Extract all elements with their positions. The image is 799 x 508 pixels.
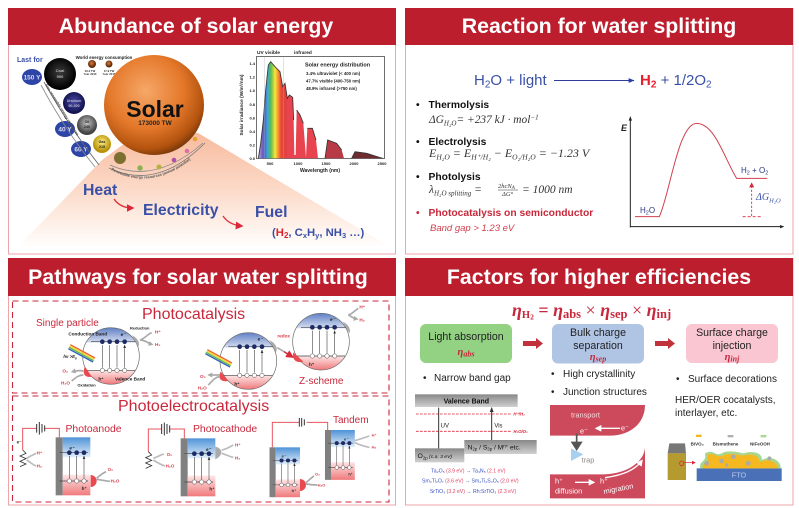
single particle diagram	[36, 318, 161, 387]
box: surface charge injection: Surface charge	[696, 327, 768, 339]
energy diagram: H	[640, 206, 646, 215]
box: light absorption: Light absorption	[428, 331, 504, 343]
band gap diagram: Vis	[494, 423, 503, 429]
photoanode diagram: e⁻	[17, 439, 22, 444]
heading: pathways for solar water splitting: Pathways for solar water splitting	[28, 265, 368, 289]
solar spectrum chart	[239, 50, 387, 174]
factor bullets: HER/OER cocatalysts,	[675, 395, 776, 406]
world energy consumption	[76, 55, 133, 76]
band gap diagram: Sm₂Ti₂O₇ (3.6 eV) → Sm₂Ti₂S₂O₅ (2.0 eV)	[422, 479, 519, 485]
solar spectrum chart: 2000	[350, 161, 359, 166]
reaction equation: H	[474, 72, 485, 89]
band gap diagram: H₂O/O₂	[513, 429, 528, 434]
efficiency formula: abs	[563, 307, 581, 321]
BiVO4 photoanode illustration: FTO	[732, 471, 747, 480]
heat to electricity to fuel: 3	[342, 231, 346, 240]
efficiency formula: H	[522, 310, 530, 321]
photocathode diagram	[146, 423, 257, 496]
band gap diagram: 2p	[423, 455, 428, 460]
BiVO4 photoanode illustration	[668, 435, 782, 481]
world energy consumption: 17.9 TW	[104, 69, 115, 73]
box: bulk charge separation: η	[590, 352, 596, 363]
photocathode diagram: h⁺	[209, 487, 214, 492]
single particle diagram: Valence Band	[115, 377, 145, 382]
non-renewable energy spheres	[17, 57, 111, 157]
heading: reaction for water splitting: Reaction for water splitting	[462, 14, 736, 38]
reaction equation: 2	[706, 80, 712, 90]
reaction equation: 2	[651, 80, 657, 90]
charge transport diagram: transport	[571, 411, 600, 420]
photoanode diagram: e⁻	[69, 445, 75, 450]
method list: O₂/H₂O	[512, 152, 536, 162]
reaction equation: 2	[485, 80, 491, 90]
method list: = E	[450, 146, 472, 160]
box: bulk charge separation: sep	[595, 354, 606, 364]
solar spectrum chart: 0.8	[249, 102, 256, 107]
world energy consumption: 23.3 TW	[85, 69, 96, 73]
heat to electricity to fuel: x	[303, 231, 308, 240]
method list: λ	[429, 184, 434, 196]
method list: Band gap > 1.23 eV	[430, 223, 516, 234]
photocathode diagram: O₂	[167, 452, 172, 457]
box: surface charge injection	[686, 324, 778, 364]
heat to electricity to fuel: y	[315, 231, 320, 240]
solar spectrum chart: 0.2	[249, 142, 256, 148]
charge transport diagram: h⁺	[555, 477, 563, 486]
method list: = 1000 nm	[522, 184, 573, 196]
factor bullets: •	[423, 373, 427, 384]
solar spectrum chart: 1.2	[249, 74, 256, 80]
tandem diagram: H₂O	[318, 482, 325, 487]
solar spectrum chart: 1500	[322, 161, 331, 166]
single particle diagram: H₂	[155, 342, 160, 347]
band gap diagram: UV	[441, 423, 449, 429]
factor bullets: High crystallinity	[563, 369, 635, 380]
solar spectrum chart: Solar irradiance (W/m²/nm)	[239, 74, 245, 136]
solar sphere	[104, 55, 204, 155]
box: bulk charge separation	[552, 324, 644, 364]
panel: reaction for water splitting	[405, 8, 793, 254]
band gap diagram	[415, 394, 537, 495]
efficiency formula: ×	[627, 300, 647, 320]
heat to electricity to fuel: Fuel	[255, 204, 287, 221]
photoanode diagram: Photoanode	[66, 424, 122, 435]
method list: −1	[530, 114, 539, 122]
energy diagram: 2	[646, 210, 649, 216]
single particle diagram: Single particle	[36, 318, 99, 329]
method list: H₂O splitting	[433, 190, 472, 198]
non-renewable energy spheres: 900	[57, 74, 64, 79]
tandem diagram: h⁺	[292, 488, 296, 493]
arrow: absorption to separation	[523, 338, 543, 349]
renewable arc and spheres: Renewable energy resources (annual potential)	[111, 158, 190, 180]
energy diagram: O	[649, 206, 655, 215]
solar spectrum chart: 0.0	[249, 156, 256, 161]
band gap diagram: O	[418, 453, 423, 460]
method list: ΔG°	[501, 191, 514, 198]
box: bulk charge separation: separation	[573, 340, 623, 352]
box: light absorption: abs	[463, 350, 474, 358]
non-renewable energy spheres: Coal	[56, 68, 64, 73]
factor bullets: Narrow band gap	[434, 373, 511, 384]
box: bulk charge separation: Bulk charge	[570, 327, 626, 339]
factor bullets: •	[676, 374, 680, 385]
photocathode diagram: H₂O	[166, 463, 175, 468]
solar spectrum chart: Solar energy distribution	[305, 62, 371, 68]
factor bullets: interlayer, etc.	[675, 408, 737, 419]
solar spectrum chart: 1.0	[249, 88, 256, 93]
band gap diagram: / M	[492, 444, 503, 451]
efficiency formula: 2	[530, 312, 534, 322]
solar spectrum chart: UV visible	[257, 50, 280, 56]
method list: = −1.23 V	[536, 146, 591, 160]
method list: Thermolysis	[428, 100, 489, 111]
world energy consumption: Year 2040	[84, 72, 97, 76]
heat to electricity to fuel: Electricity	[143, 202, 219, 219]
section title: photoelectrocatalysis: Photoelectrocatalysis	[118, 398, 269, 415]
heading: factors for higher efficiencies: Factors for higher efficiencies	[447, 265, 751, 289]
z-scheme diagram: h⁺	[234, 382, 240, 387]
arrow: separation to injection	[655, 338, 675, 349]
box: light absorption: η	[458, 347, 463, 358]
solar spectrum chart: 1.4	[249, 61, 256, 66]
solar spectrum chart: 1000	[294, 161, 303, 166]
heat to electricity to fuel: 2	[284, 231, 289, 240]
non-renewable energy spheres: 215	[99, 145, 105, 149]
single particle diagram: h⁺	[98, 376, 104, 381]
factor bullets: Junction structures	[563, 387, 647, 398]
z-scheme diagram: Z-scheme	[299, 376, 344, 387]
charge transport diagram: diffusion	[555, 486, 582, 495]
efficiency formula: η	[647, 300, 657, 320]
efficiency formula: =	[534, 300, 553, 320]
band gap diagram: 2p	[472, 447, 478, 452]
method list: Photocatalysis on semiconductor	[428, 208, 593, 219]
photoanode diagram: O₂	[108, 467, 113, 472]
solar spectrum chart: 47.7% visible (400-750 nm)	[306, 78, 361, 84]
method list: − E	[491, 146, 513, 160]
heat to electricity to fuel	[83, 182, 365, 240]
non-renewable arc	[41, 82, 99, 167]
solar spectrum chart: 48.9% infrared (>750 nm)	[306, 86, 357, 91]
energy diagram: 2	[765, 170, 768, 176]
photoanode diagram: H⁺	[37, 451, 42, 456]
single particle diagram: Reduction	[130, 326, 150, 331]
method list: H₂O	[435, 152, 450, 162]
single particle diagram: Oxidation	[77, 382, 96, 387]
BiVO4 photoanode illustration: Bismuthene	[713, 441, 739, 446]
solar spectrum chart: 0.6	[249, 116, 256, 120]
solar sphere: 173000 TW	[138, 120, 173, 127]
single particle diagram: O₂	[62, 369, 68, 374]
tandem diagram: H⁺	[372, 432, 377, 437]
heat to electricity to fuel: , C	[288, 227, 303, 239]
header bar: abundance	[8, 8, 396, 45]
reaction equation	[474, 72, 712, 90]
charge transport diagram: migration	[603, 481, 634, 496]
dashed frames	[12, 301, 389, 502]
solar spectrum chart: Wavelength (nm)	[300, 168, 340, 174]
solar spectrum chart: 0.4	[249, 129, 256, 134]
world energy consumption: World energy consumption	[76, 55, 133, 60]
tandem diagram: Tandem	[333, 415, 369, 426]
efficiency formula: η	[600, 300, 610, 320]
box: light absorption	[420, 324, 512, 363]
tandem diagram: e⁻	[282, 453, 287, 458]
efficiency formula: sep	[610, 307, 628, 321]
energy diagram	[621, 116, 784, 228]
band gap diagram: (c.a. 3 eV)	[428, 454, 452, 460]
photocathode diagram: H₂	[235, 455, 240, 460]
reaction equation: + 1/2O	[656, 72, 706, 89]
z-scheme diagram: redox	[277, 334, 290, 339]
method list: •	[416, 172, 420, 183]
z-scheme diagram: H₂	[359, 318, 365, 323]
renewable arc and spheres	[108, 136, 206, 180]
heat to electricity to fuel: …)	[346, 227, 365, 239]
heat to electricity to fuel: (H	[272, 227, 284, 239]
single particle diagram: hν >E	[63, 354, 75, 359]
factor bullets: Surface decorations	[688, 374, 777, 385]
energy diagram: H₂O	[768, 198, 781, 204]
photocathode diagram: H⁺	[235, 443, 241, 448]
single particle diagram: H₂O	[61, 380, 70, 385]
factor bullets: •	[551, 369, 555, 380]
energy diagram: E	[621, 123, 628, 133]
method list: Electrolysis	[428, 137, 487, 148]
single particle diagram: H⁺	[155, 330, 161, 335]
method list: •	[416, 137, 420, 148]
band gap diagram: Ta₂O₅ (3.9 eV) → Ta₃N₅ (2.1 eV)	[431, 468, 506, 474]
box: surface charge injection: inj	[730, 354, 740, 364]
non-renewable energy spheres: 60 Y	[74, 146, 88, 154]
BiVO4 photoanode illustration: NiFeOOH	[750, 441, 770, 446]
z-scheme diagram: h⁺	[309, 362, 315, 367]
section title: photocatalysis: Photocatalysis	[142, 306, 245, 323]
photoanode diagram: H₂	[37, 464, 42, 469]
non-renewable energy spheres: 150 Y	[24, 74, 41, 82]
efficiency formula: ×	[581, 300, 600, 320]
tandem diagram: h⁺	[348, 471, 353, 476]
non-renewable energy spheres: Gas	[99, 140, 105, 144]
factor bullets	[423, 369, 777, 419]
photocathode diagram: Photocathode	[193, 424, 257, 435]
band gap diagram: 3p	[487, 447, 493, 452]
z-scheme diagram: H⁺	[359, 305, 366, 310]
BiVO4 photoanode illustration: BiVO₄	[691, 441, 704, 446]
z-scheme diagram	[198, 305, 366, 391]
method list: ΔG	[429, 114, 444, 126]
charge transport diagram: e⁻	[621, 424, 629, 433]
method list: Photolysis	[428, 172, 481, 183]
non-renewable energy spheres: Last for	[17, 57, 43, 64]
z-scheme diagram: O₂	[200, 374, 206, 379]
header bar: factors	[405, 258, 793, 296]
z-scheme diagram: e⁻	[258, 337, 263, 342]
non-renewable energy spheres: Uranium	[67, 99, 81, 103]
method list: H₂O	[443, 120, 456, 128]
band gap diagram: / S	[477, 444, 488, 451]
heat to electricity to fuel: H	[307, 227, 315, 239]
non-renewable energy spheres: 40 Y	[58, 126, 72, 134]
energy diagram: + O	[750, 166, 765, 175]
solar sphere: Solar	[126, 96, 184, 122]
tandem diagram	[270, 415, 377, 497]
header bar: reaction	[405, 8, 793, 45]
panel: factors for higher efficiencies	[405, 258, 793, 505]
z-scheme diagram: e⁻	[330, 317, 336, 322]
heading: abundance of solar energy: Abundance of solar energy	[59, 14, 333, 38]
heat to electricity to fuel: , NH	[319, 227, 342, 239]
energy diagram: H	[741, 166, 747, 175]
method list: •	[416, 208, 420, 219]
charge transport diagram	[550, 405, 645, 498]
energy diagram: ΔG	[756, 192, 769, 203]
method list: •	[416, 100, 420, 111]
band gap diagram: Valence Band	[444, 398, 489, 405]
method list: A	[511, 186, 516, 191]
solar spectrum chart: 2500	[378, 161, 387, 166]
band gap diagram: N	[468, 444, 472, 451]
photocathode diagram: e⁻	[206, 447, 211, 452]
band gap diagram: H⁺/H₂	[513, 412, 525, 417]
non-renewable arc: Non-renewable energy resources	[44, 83, 79, 136]
header bar: pathways	[8, 258, 396, 296]
non-renewable energy spheres: Oil	[85, 120, 89, 124]
method list: H⁺/H₂	[470, 152, 491, 162]
method list: 2hcN	[498, 183, 512, 190]
fan highlight below solar sphere	[17, 125, 392, 248]
non-renewable energy spheres: 90-300	[68, 104, 80, 108]
method list	[416, 100, 593, 234]
z-scheme diagram: H₂O	[198, 386, 207, 391]
reaction equation: O + light	[490, 72, 548, 89]
solar spectrum chart: infrared	[294, 50, 312, 56]
charge transport diagram: h⁺	[600, 477, 608, 486]
panel: pathways for solar water splitting	[8, 258, 396, 505]
world energy consumption: Year 2015	[103, 72, 116, 76]
method list: = +237 kJ · mol	[456, 114, 530, 126]
photoanode diagram	[17, 422, 122, 495]
charge transport diagram: trap	[582, 455, 594, 464]
solar spectrum chart: 3.4% ultraviolet (< 400 nm)	[306, 71, 361, 76]
heat to electricity to fuel: Heat	[83, 182, 118, 199]
tandem diagram: e⁻	[344, 437, 349, 442]
energy diagram: 2	[747, 170, 750, 176]
band gap diagram: SrTiO₃ (3.2 eV) → Rh:SrTiO₃ (2.3 eV)	[430, 489, 516, 495]
band gap diagram: etc.	[508, 444, 521, 451]
tandem diagram: H₂	[372, 444, 377, 449]
panel: abundance of solar energy	[8, 8, 396, 254]
method list: =	[471, 184, 482, 196]
photoanode diagram: h⁺	[82, 486, 87, 491]
non-renewable energy spheres: 240	[84, 125, 90, 129]
charge transport diagram: e⁻	[580, 426, 588, 435]
single particle diagram: g	[74, 356, 77, 360]
photoanode diagram: H₂O	[111, 479, 120, 484]
solar spectrum chart: 500	[267, 161, 274, 166]
band gap diagram: n+	[503, 443, 509, 448]
box: surface charge injection: η	[725, 352, 730, 363]
box: surface charge injection: injection	[713, 340, 752, 352]
efficiency formula: η	[553, 300, 563, 320]
single particle diagram: Conduction Band	[68, 331, 107, 336]
method list: E	[429, 146, 436, 160]
efficiency formula: η	[512, 300, 522, 320]
single particle diagram: e⁻	[121, 332, 126, 337]
efficiency formula: inj	[657, 307, 671, 321]
factor bullets: •	[551, 387, 555, 398]
reaction equation: H	[640, 72, 657, 90]
tandem diagram: O₂	[315, 471, 320, 476]
